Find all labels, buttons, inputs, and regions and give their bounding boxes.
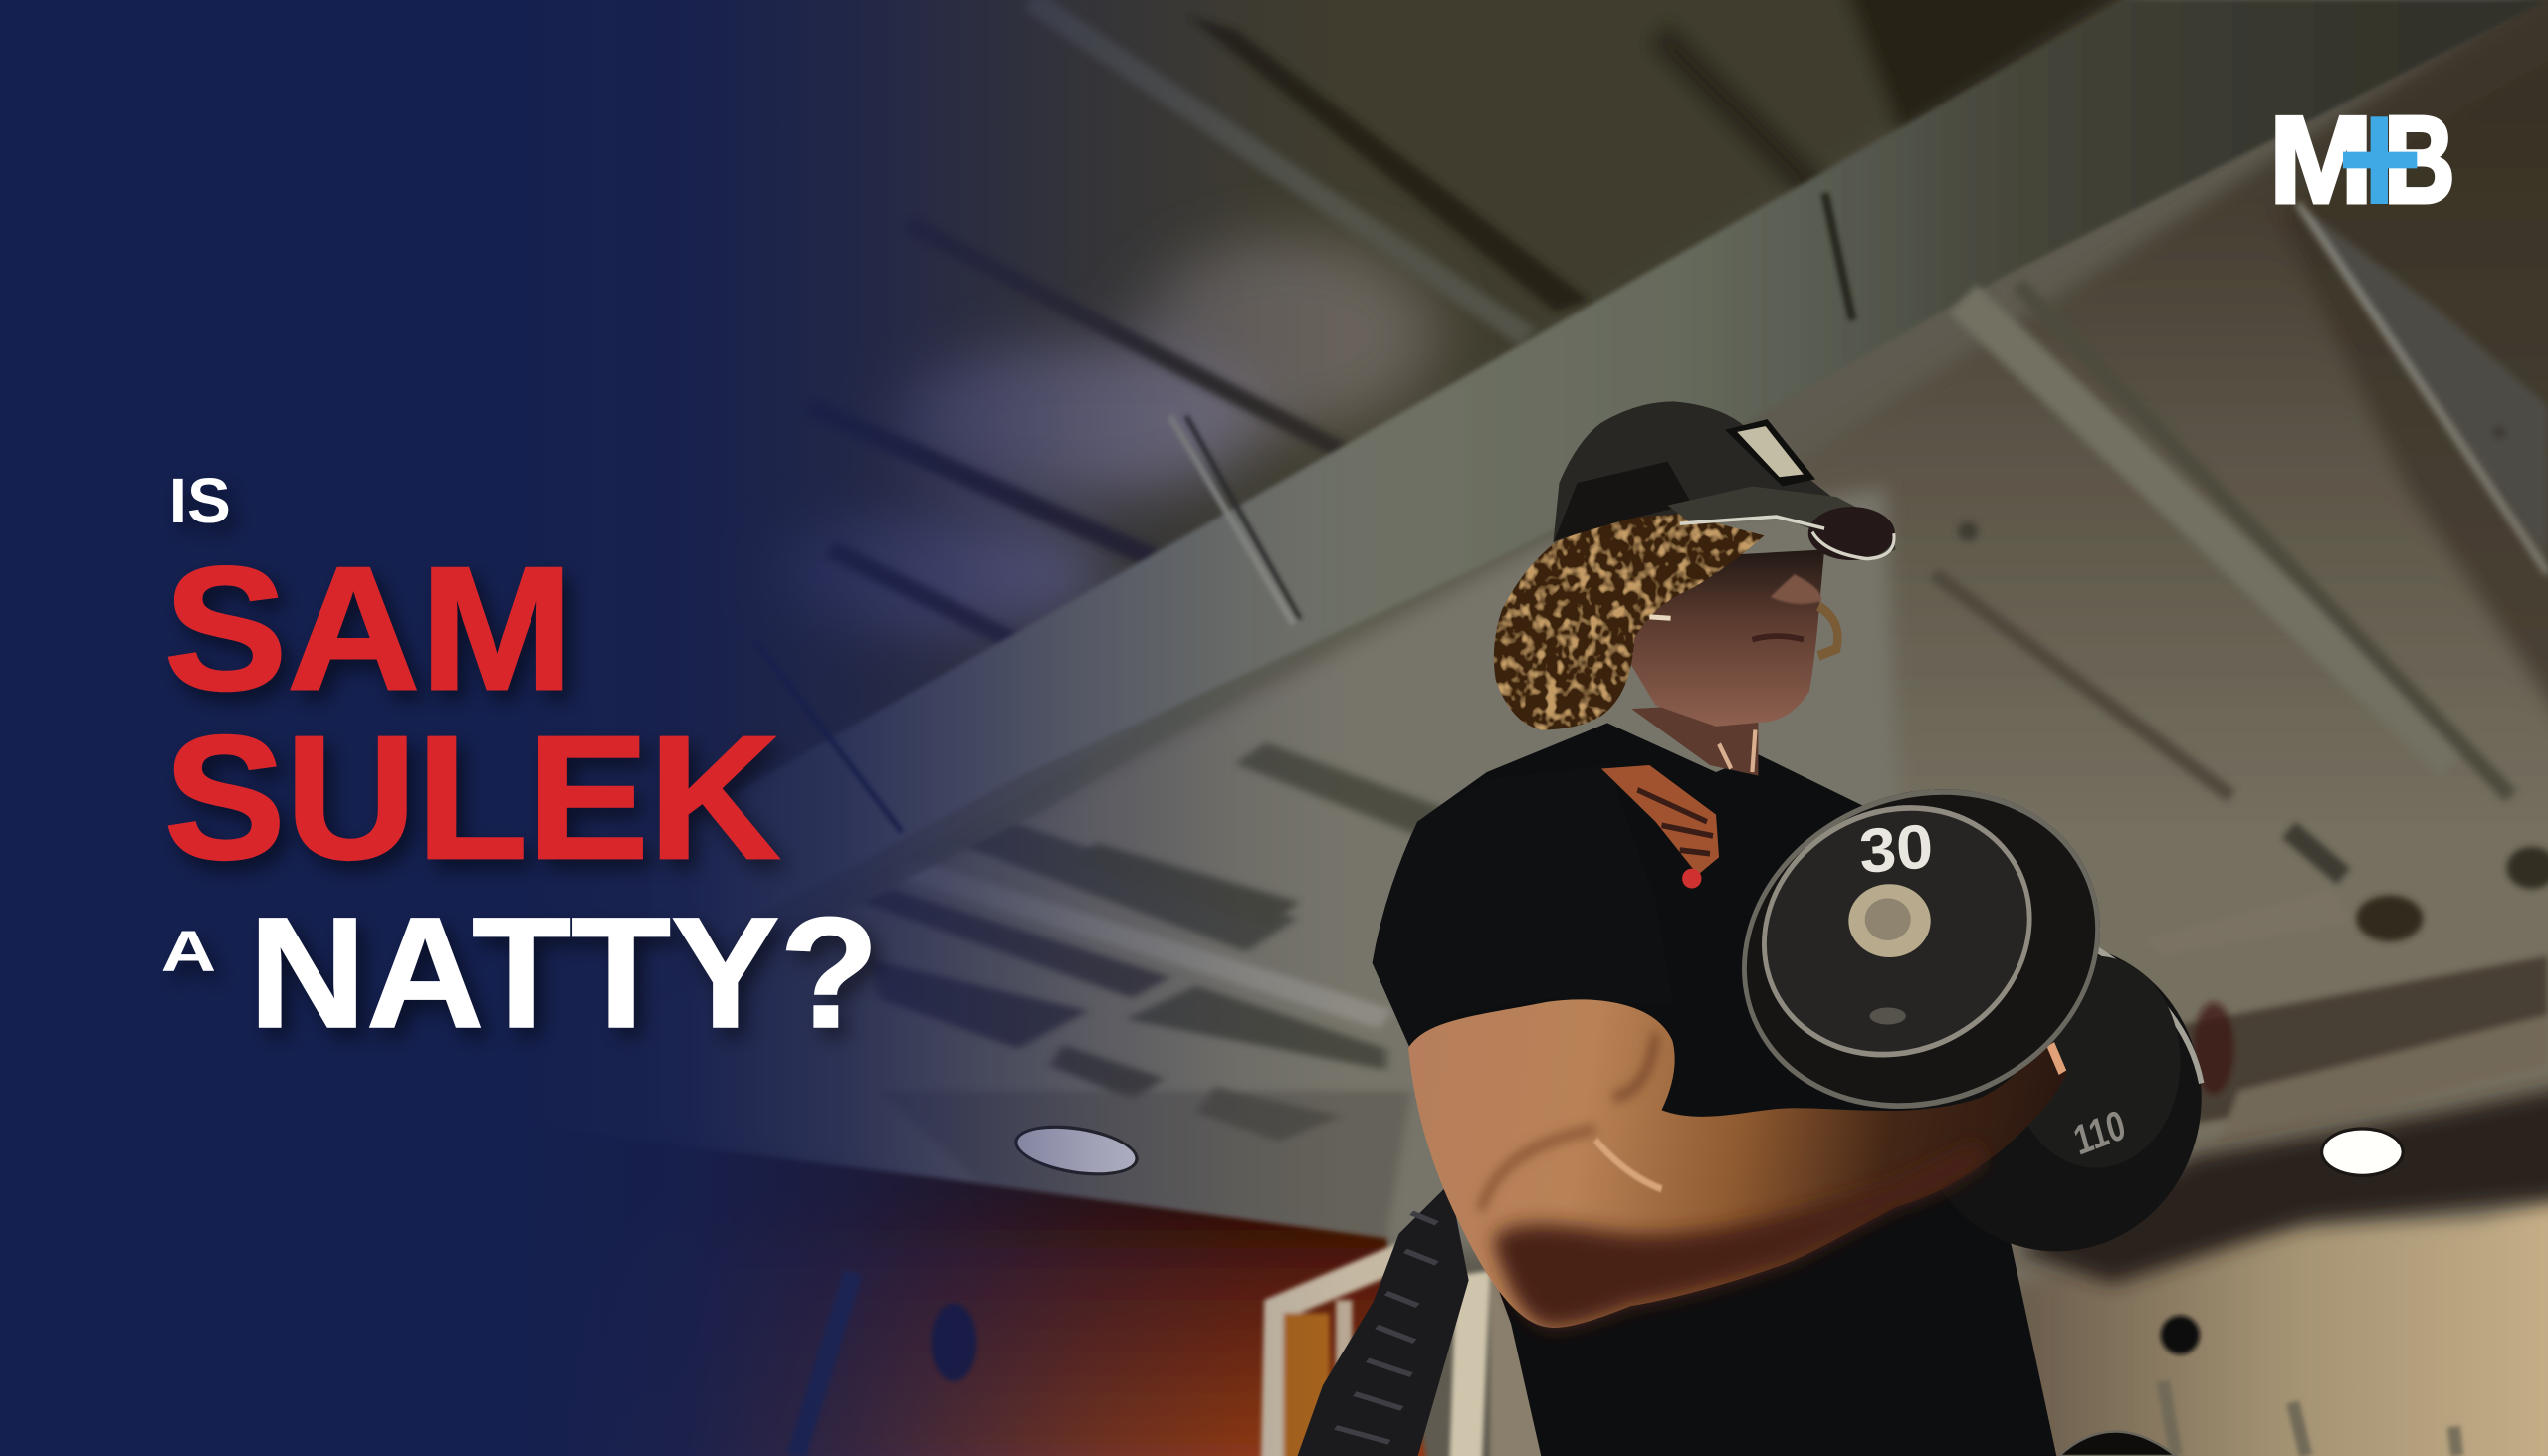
face <box>1619 549 1824 727</box>
word: A: A <box>161 920 216 984</box>
beam rods <box>755 193 1852 832</box>
curly hair <box>1494 508 1837 729</box>
front dumbbell plate <box>1716 751 2126 1146</box>
rear dumbbell plate <box>1912 943 2202 1251</box>
word: IS: IS <box>169 466 231 536</box>
right ceiling below beam <box>1755 0 2548 1300</box>
word: NATTY?: NATTY? <box>249 885 879 1061</box>
man with dumbbell <box>1373 401 2202 1456</box>
ceiling light left <box>1011 1118 1142 1183</box>
ceiling light right <box>2320 1127 2405 1177</box>
shirt logo <box>1601 765 1719 888</box>
logo letter M: M <box>2269 92 2373 229</box>
mid ceiling panels left of man <box>650 488 1918 1268</box>
MB logo <box>2269 92 2455 229</box>
neck <box>1631 702 1758 776</box>
soft panel glows <box>768 239 1438 635</box>
shirt sleeve <box>1373 765 1674 1044</box>
dark soffit above wall <box>2017 1081 2548 1284</box>
plate weight number: 30 <box>1857 811 1935 887</box>
flexed arm <box>1408 999 2067 1328</box>
battle rope <box>1297 1183 1469 1456</box>
cream wall right <box>2015 1186 2548 1456</box>
pole and wall fixture on orange <box>796 1272 976 1456</box>
wall hooks and dot <box>2161 1316 2457 1456</box>
cap <box>1553 401 1896 560</box>
rear dumbbell plate: 110 <box>2069 1102 2130 1164</box>
upper ceiling panels <box>617 0 2178 870</box>
lower right ceiling bands <box>2142 830 2548 1145</box>
torso and black t-shirt <box>1373 723 2056 1456</box>
bottom dumbbell edge <box>2059 1432 2176 1456</box>
word: SAM: SAM <box>164 530 573 727</box>
headline <box>161 466 879 1061</box>
word: SULEK: SULEK <box>164 700 780 896</box>
orange wall <box>488 1122 1430 1456</box>
logo letter B: B <box>2384 92 2455 229</box>
logo plus sign <box>2343 116 2417 204</box>
nose and lips <box>1752 574 1821 640</box>
main diagonal beam <box>650 0 2548 994</box>
neck highlight <box>1719 729 1755 772</box>
gym rack frame <box>1261 1243 1547 1456</box>
right ceiling strips <box>1934 203 2548 796</box>
